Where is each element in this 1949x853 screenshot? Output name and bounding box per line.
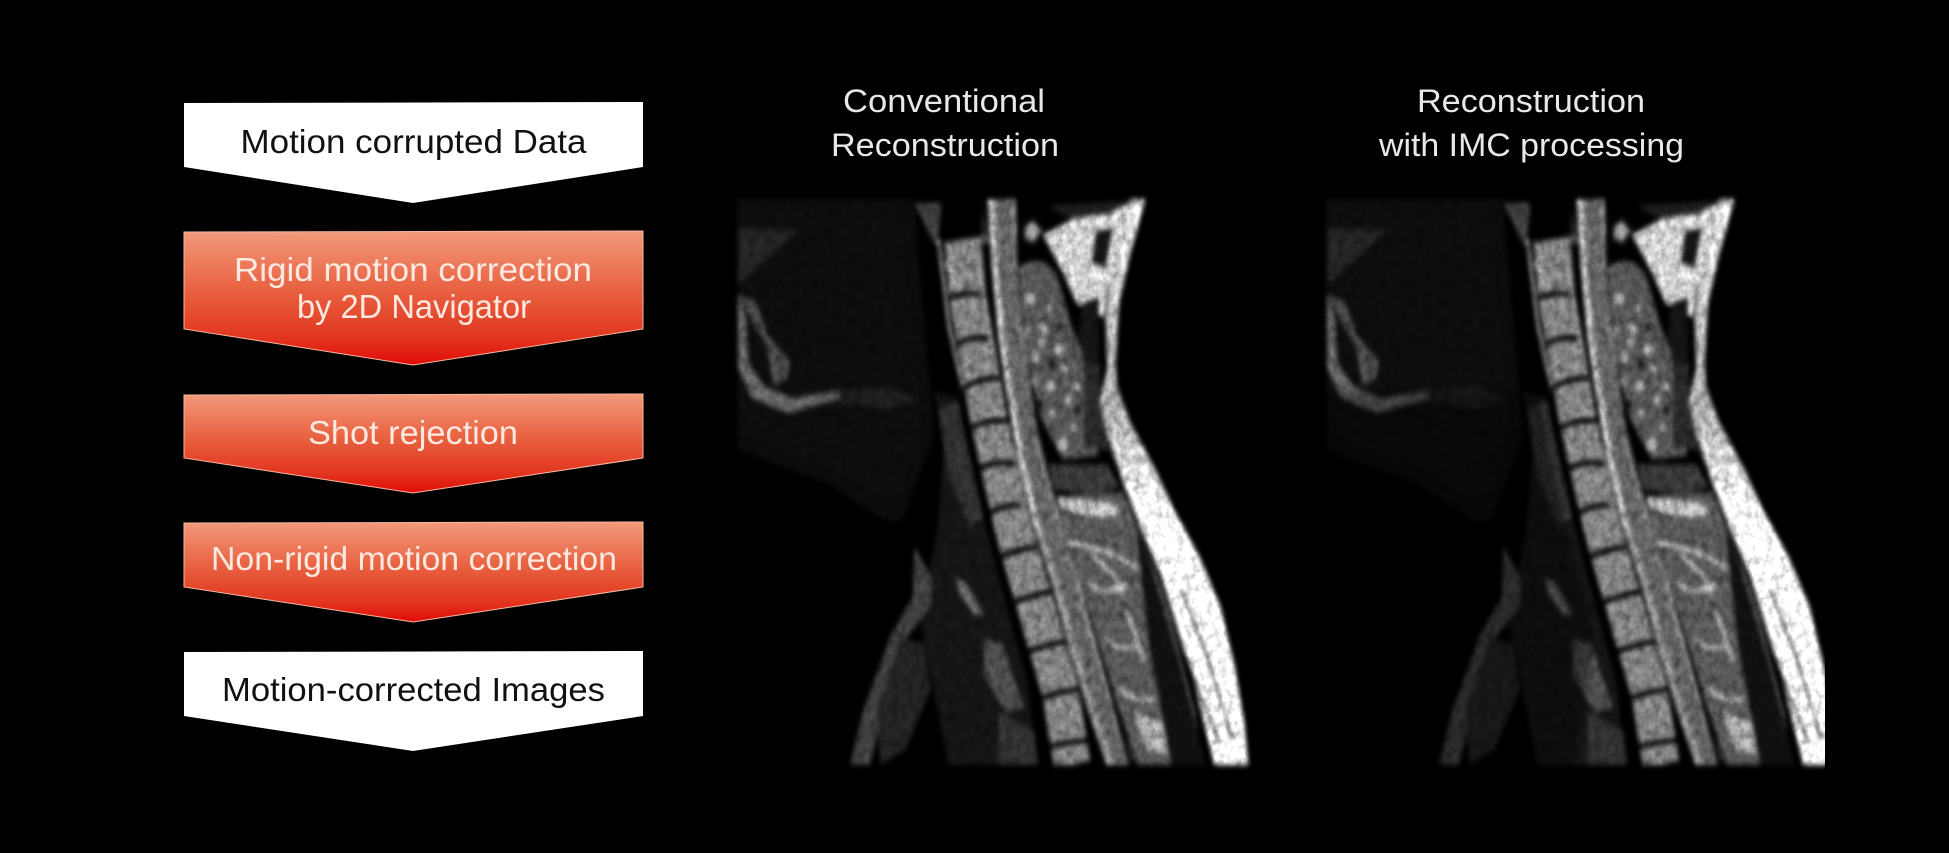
heading: Reconstruction with IMC processing bbox=[1378, 83, 1684, 163]
heading: Conventional Reconstruction: Reconstruction bbox=[831, 127, 1059, 163]
flow step: Motion-corrected Images bbox=[184, 651, 643, 751]
flow step: Rigid motion correction by 2D Navigator: by 2D Navigator bbox=[297, 288, 531, 325]
flow step: Motion-corrected Images: Motion-corrected Images bbox=[222, 671, 605, 708]
flow step: Rigid motion correction by 2D Navigator: Rigid motion correction bbox=[234, 251, 592, 288]
flow step: Non-rigid motion correction bbox=[184, 522, 643, 622]
infographic canvas bbox=[184, 88, 1825, 770]
flow step: Rigid motion correction by 2D Navigator bbox=[184, 231, 643, 365]
flow step: Shot rejection bbox=[184, 394, 643, 493]
flow step: Motion corrupted Data: Motion corrupted Data bbox=[240, 123, 587, 160]
flow step: Non-rigid motion correction: Non-rigid motion correction bbox=[211, 540, 617, 577]
heading: Reconstruction with IMC processing: Reconstruction bbox=[1417, 83, 1645, 119]
MRI image: reconstruction with IMC processing bbox=[1324, 195, 1825, 770]
flow step: Motion corrupted Data bbox=[184, 102, 643, 203]
heading: Reconstruction with IMC processing: with IMC processing bbox=[1378, 127, 1684, 163]
flow step: Shot rejection: Shot rejection bbox=[308, 414, 518, 451]
heading: Conventional Reconstruction: Conventional bbox=[843, 83, 1045, 119]
heading: Conventional Reconstruction bbox=[831, 83, 1059, 163]
MRI image: conventional reconstruction bbox=[720, 162, 1280, 789]
